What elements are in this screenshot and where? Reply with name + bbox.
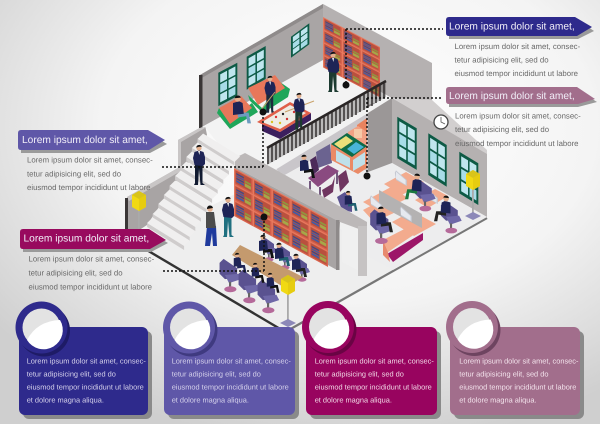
card 3 text: tetur adipisicing elit, sed do <box>315 369 404 378</box>
text block: top right: eiusmod tempor incididunt ut labore <box>454 69 578 78</box>
card 4 ring icon <box>446 301 500 356</box>
stairs <box>147 134 240 250</box>
window: lower 2 <box>428 133 447 187</box>
man at bookcase <box>327 52 339 92</box>
meeting front chairs <box>220 259 279 313</box>
text block: left lower: Lorem ipsum dolor sit amet, consec- <box>28 255 155 264</box>
office chairs and workers <box>370 174 462 244</box>
man seated on sofa <box>233 95 251 123</box>
text block: right <box>455 112 581 148</box>
panel: card 1 <box>16 302 152 419</box>
upper wall dark post <box>199 75 202 128</box>
card 4 text: tetur adipisicing elit, sed do <box>459 369 548 378</box>
upper floor <box>200 60 392 168</box>
card 4 text <box>459 356 579 404</box>
card 2 ring icon <box>163 302 218 356</box>
callout line 3 <box>162 108 266 167</box>
dark wall segment <box>368 98 392 178</box>
banner: right mauve: Lorem ipsum dolor sit amet, <box>449 91 575 102</box>
banner: left violet: Lorem ipsum dolor sit amet, <box>22 135 148 146</box>
card 1 text: eiusmod tempor incididunt ut labore <box>27 382 144 391</box>
man at dining table <box>300 155 315 178</box>
upper bookcase <box>323 17 380 97</box>
lamp: meeting room <box>280 275 296 327</box>
man in grey shirt <box>205 205 217 246</box>
banner: left violet <box>18 130 167 153</box>
card 3 text: et dolore magna aliqua. <box>315 395 392 404</box>
man typing near wall <box>337 191 358 212</box>
lower bookcase <box>234 168 328 267</box>
callout line 2 <box>364 98 442 180</box>
stair wall top band <box>127 125 205 201</box>
banner: right mauve <box>446 87 597 107</box>
office partition <box>379 190 422 228</box>
dining table and chairs <box>308 156 349 198</box>
card 2 body <box>164 327 299 419</box>
card 1 ring icon <box>16 302 70 356</box>
upper left wall <box>200 4 323 128</box>
upper slab edge <box>267 97 392 170</box>
laptops <box>370 170 438 222</box>
divider top band <box>235 153 367 232</box>
text block: top right: Lorem ipsum dolor sit amet, consec- <box>454 42 581 51</box>
card 3 body <box>306 327 441 419</box>
stair side wall <box>127 125 207 238</box>
card 2 text: tetur adipisicing elit, sed do <box>172 369 261 378</box>
stair wall post <box>125 198 128 240</box>
callout line 4 <box>163 214 268 271</box>
window: lower 3 <box>459 152 478 205</box>
text block: top right <box>454 42 581 78</box>
upper right wall <box>323 4 432 100</box>
card 4 text: et dolore magna aliqua. <box>459 395 537 404</box>
card 4 text: Lorem ipsum dolor sit amet, consec- <box>459 356 579 365</box>
card 1 text: tetur adipisicing elit, sed do <box>27 369 116 378</box>
outer floor edge left <box>140 246 287 333</box>
card 4 text: eiusmod tempor incididunt ut labore <box>459 382 576 391</box>
text block: right: Lorem ipsum dolor sit amet, consec- <box>455 112 581 120</box>
pool table <box>257 102 311 139</box>
man playing pool <box>285 93 314 130</box>
text block: right: tetur adipisicing elit, sed do <box>455 125 550 134</box>
wall clock <box>434 115 448 129</box>
text block: left lower <box>28 255 155 291</box>
card 3 text: Lorem ipsum dolor sit amet, consec- <box>315 356 434 365</box>
text block: left upper: eiusmod tempor incididunt ut labore <box>27 183 151 192</box>
card 2 text: et dolore magna aliqua. <box>172 395 249 404</box>
outer floor edge right <box>287 218 487 331</box>
back cabinet <box>316 118 367 168</box>
text block: left lower: eiusmod tempor incididunt ut labore <box>28 282 152 291</box>
lower back wall <box>235 167 340 270</box>
card 3 ring icon <box>302 301 356 356</box>
card 2 text: eiusmod tempor incididunt ut labore <box>172 382 289 391</box>
lamp: office <box>465 170 481 220</box>
text block: left upper <box>27 156 153 192</box>
callout line 1 <box>342 29 443 88</box>
card 3 text: eiusmod tempor incididunt ut labore <box>315 382 432 391</box>
text block: top right: tetur adipisicing elit, sed do <box>454 56 549 65</box>
banner: top right blue: Lorem ipsum dolor sit amet, <box>449 22 575 32</box>
man standing with cue <box>261 76 276 113</box>
card 4 body <box>450 327 584 419</box>
lower room back wall <box>275 113 368 176</box>
sofa left <box>217 96 258 129</box>
window: upper middle <box>247 46 266 90</box>
text block: left lower: tetur adipisicing elit, sed do <box>28 268 123 277</box>
window: lower 1 <box>397 117 417 170</box>
man in navy jacket <box>222 197 234 237</box>
lower room dividing wall <box>280 172 367 275</box>
card 1 text: et dolore magna aliqua. <box>27 395 104 404</box>
card 1 text: Lorem ipsum dolor sit amet, consec- <box>27 356 146 365</box>
window: upper right <box>291 23 309 58</box>
window: upper left <box>218 63 237 106</box>
text block: left upper: Lorem ipsum dolor sit amet, consec- <box>27 156 153 165</box>
banner: left magenta: Lorem ipsum dolor sit amet, <box>24 234 149 245</box>
card 2 text <box>172 356 291 404</box>
office desks <box>363 172 448 262</box>
banner: top right blue <box>446 17 594 39</box>
sofa right <box>248 75 290 113</box>
text block: left upper: tetur adipisicing elit, sed do <box>27 170 122 179</box>
lower floor slab <box>143 163 487 332</box>
upper wall top band <box>200 4 323 79</box>
panel: card 3 <box>302 301 441 419</box>
meeting people back row <box>259 235 307 277</box>
card 3 text <box>315 356 434 404</box>
lower right wall top band <box>392 98 487 154</box>
panel: card 2 <box>163 302 299 419</box>
panel: card 4 <box>446 301 584 419</box>
meeting table <box>232 245 303 288</box>
meeting people front row <box>234 253 280 293</box>
card 1 text <box>27 356 146 404</box>
card 2 text: Lorem ipsum dolor sit amet, consec- <box>172 356 291 365</box>
card 1 body <box>19 327 152 419</box>
divider end posts <box>336 220 367 276</box>
lower room floor <box>283 150 487 270</box>
isometric building <box>125 4 487 333</box>
railing <box>267 80 386 165</box>
man on stairs <box>193 145 205 185</box>
meeting table chairs back <box>261 237 310 282</box>
counter cabinet <box>331 133 367 174</box>
lamp: stair <box>132 191 146 240</box>
banner: left magenta <box>20 229 168 252</box>
lower right wall <box>392 98 487 217</box>
text block: right: eiusmod tempor incididunt ut labore <box>455 139 579 148</box>
